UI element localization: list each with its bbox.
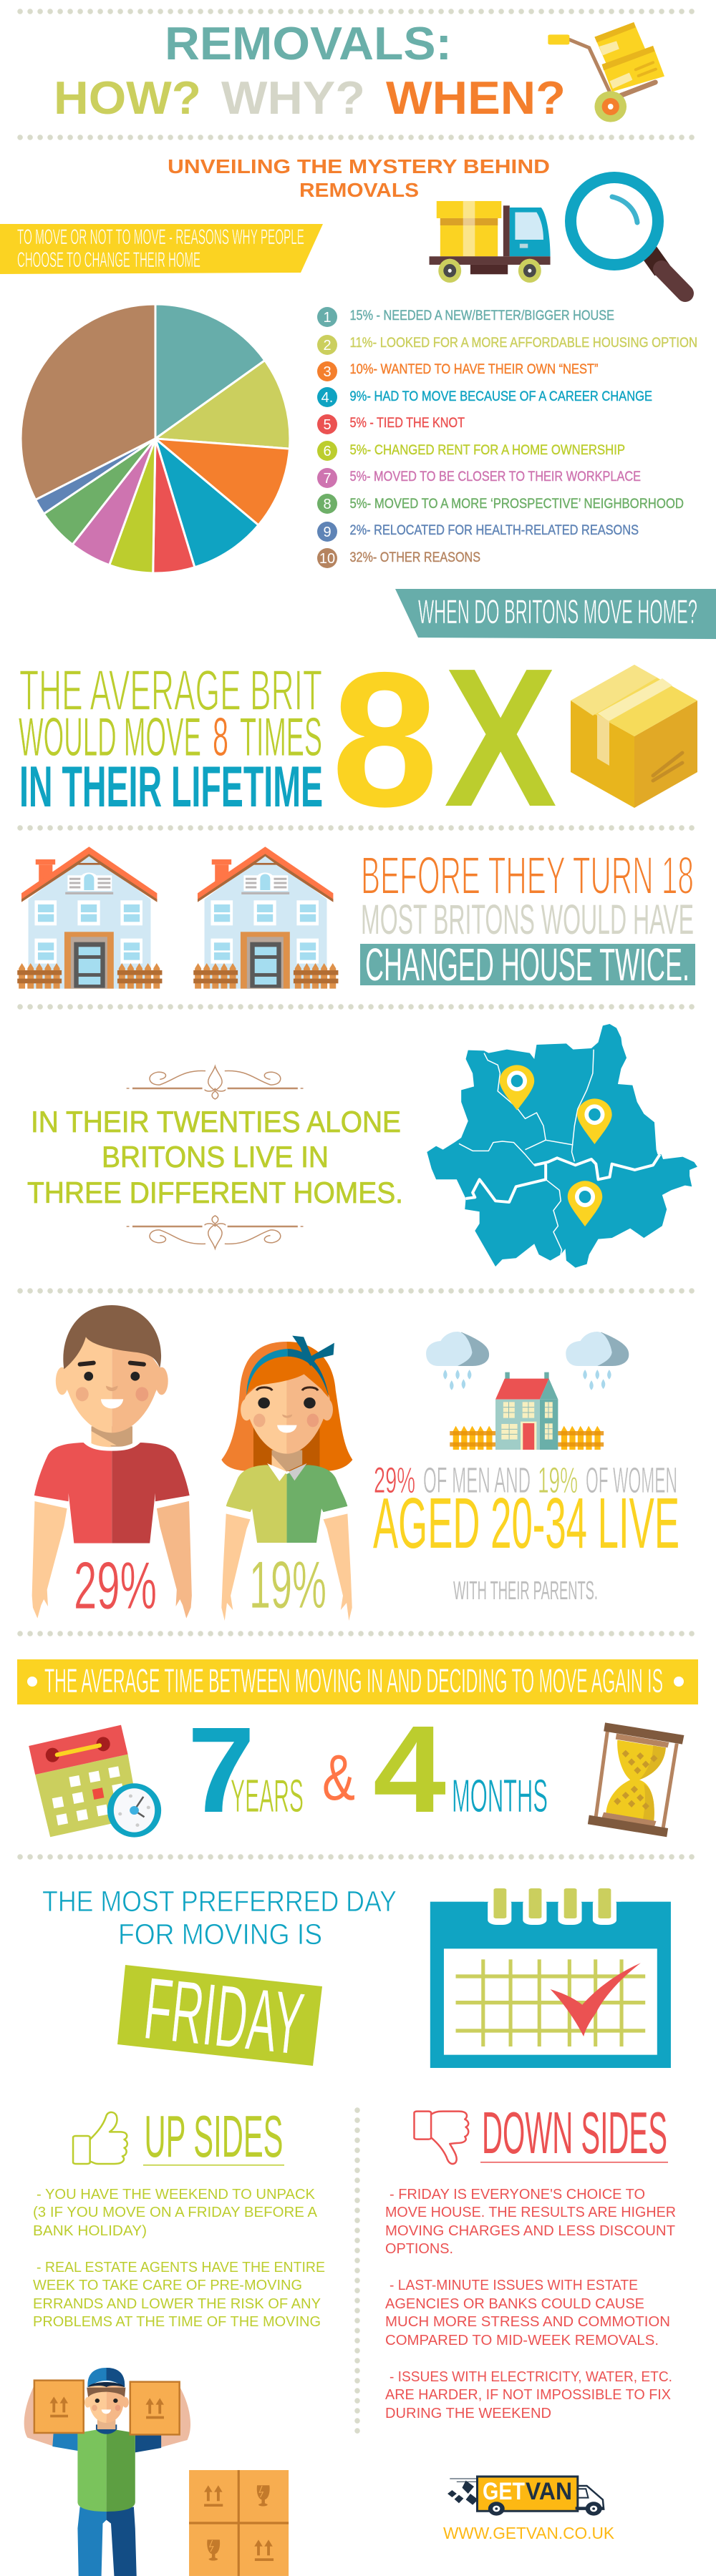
illustration: young man: [32, 1305, 192, 1619]
text: up sides list: - YOU HAVE THE WEEKEND TO UNPACK: [37, 2186, 315, 2202]
banner: reasons why people move: [0, 224, 323, 274]
icon: calendar with clock: [29, 1725, 161, 1838]
text: down sides list: MOVE HOUSE. THE RESULTS ARE HIGHER: [385, 2204, 676, 2220]
text: down sides list: AGENCIES OR BANKS COULD CAUSE: [385, 2296, 644, 2312]
label: friday: FRIDAY: [140, 1960, 308, 2074]
icon: stacked boxes: [189, 2470, 289, 2576]
legend item 2: [317, 335, 697, 355]
logo: getvan: VAN: [526, 2478, 572, 2505]
title: WHEN?: [386, 72, 566, 124]
stat: 7 years and 4 months: &: [322, 1742, 355, 1814]
title: HOW?: [54, 72, 201, 124]
legend item 6: [317, 441, 625, 461]
text: men and women aged 20-34: 19%: [538, 1460, 578, 1501]
legend item 8: [317, 494, 684, 514]
text: average brit moves 8 times: 8: [213, 707, 228, 768]
icon: delivery truck: [430, 201, 551, 283]
ornament: bottom flourish: [127, 1216, 303, 1249]
legend item 8: 8: [323, 497, 332, 512]
text: most preferred day: THE MOST PREFERRED DAY: [42, 1885, 397, 1918]
legend item 9: [317, 522, 639, 542]
stat: 7 years and 4 months: 7: [188, 1702, 255, 1838]
text: average brit moves 8 times: THE AVERAGE BRIT: [19, 658, 322, 722]
title: [54, 17, 566, 124]
big number 8X: X: [444, 628, 558, 848]
legend item 9: 2%- RELOCATED FOR HEALTH-RELATED REASONS: [349, 523, 639, 538]
legend: pie chart reasons: [317, 307, 697, 568]
legend item 5: 5% - TIED THE KNOT: [349, 416, 465, 431]
big number 8X: 8: [332, 632, 438, 847]
title: WHY?: [221, 72, 365, 124]
legend item 1: 1: [323, 310, 332, 326]
pie chart: reasons for moving: [21, 304, 290, 573]
legend item 3: 10%- WANTED TO HAVE THEIR OWN “NEST”: [349, 362, 599, 377]
legend item 4: 9%- HAD TO MOVE BECAUSE OF A CAREER CHANGE: [349, 389, 652, 404]
stat: 7 years and 4 months: 4: [373, 1699, 446, 1838]
legend item 2: 2: [323, 338, 332, 353]
icon: magnifying glass: [565, 172, 685, 293]
text: up sides list: ERRANDS AND LOWER THE RISK OF ANY: [33, 2296, 321, 2312]
text: down sides list: [385, 2186, 676, 2421]
legend item 3: 3: [323, 364, 332, 380]
text: before they turn 18: [360, 846, 695, 990]
label: friday: [117, 1960, 322, 2074]
text: down sides list: - FRIDAY IS EVERYONE'S CHOICE TO: [390, 2186, 645, 2202]
title: REMOVALS:: [165, 17, 452, 69]
legend item 6: 5%- CHANGED RENT FOR A HOME OWNERSHIP: [349, 443, 625, 458]
banner: reasons why people move: CHOOSE TO CHANGE THEIR HOME: [17, 248, 200, 272]
legend item 6: 6: [323, 444, 332, 459]
icon: wall calendar with check mark: [430, 1884, 671, 2068]
illustration: young woman: [221, 1336, 352, 1621]
legend item 1: 15% - NEEDED A NEW/BETTER/BIGGER HOUSE: [349, 308, 614, 323]
text: TIMES: [240, 707, 322, 768]
icon: hand trolley with boxes: [548, 22, 664, 122]
text: MONTHS: [452, 1770, 548, 1822]
legend item 7: 5%- MOVED TO BE CLOSER TO THEIR WORKPLACE: [349, 469, 641, 484]
icon: thumbs down: [414, 2112, 468, 2164]
legend item 10: 10: [319, 551, 335, 567]
text: average brit moves 8 times: [19, 658, 323, 819]
legend item 4: 4.: [321, 390, 333, 406]
legend item 3: [317, 361, 599, 381]
legend item 1: [317, 307, 614, 327]
text: in their twenties: THREE DIFFERENT HOMES.: [27, 1176, 403, 1209]
label: 19 percent: 19%: [249, 1547, 326, 1622]
text: in their twenties: BRITONS LIVE IN: [102, 1140, 329, 1174]
legend item 10: [317, 548, 480, 568]
logo: getvan: [448, 2477, 604, 2516]
icon: house 1: [17, 847, 162, 989]
text: most preferred day: FOR MOVING IS: [118, 1918, 322, 1951]
text: down sides list: OPTIONS.: [385, 2240, 453, 2257]
text: men and women aged 20-34: 29%: [374, 1460, 415, 1501]
text: down sides list: - ISSUES WITH ELECTRICITY, WATER, ETC.: [390, 2368, 672, 2385]
icon: raining clouds left: [426, 1332, 489, 1390]
icon: cardboard box: [571, 665, 697, 808]
subtitle: UNVEILING THE MYSTERY BEHIND: [168, 155, 550, 177]
stat: 7 years and 4 months: [188, 1699, 548, 1838]
subtitle: [168, 155, 550, 201]
logo: getvan: GET: [483, 2478, 525, 2505]
icon: small house with fence: [450, 1372, 604, 1450]
text: most preferred day: [42, 1885, 397, 1951]
stat: 7 years and 4 months: YEARS: [231, 1770, 304, 1822]
text: up sides list: BANK HOLIDAY): [33, 2223, 147, 2239]
illustration: removal man holding boxes: [24, 2368, 190, 2576]
text: men and women aged 20-34: [373, 1460, 679, 1605]
legend item 5: 5: [323, 417, 332, 433]
text: in their twenties: IN THEIR TWENTIES ALONE: [31, 1105, 401, 1138]
text: down sides list: MOVING CHARGES AND LESS DISCOUNT: [385, 2223, 675, 2239]
label: 29 percent: 29%: [74, 1548, 157, 1623]
text: down sides list: MUCH MORE STRESS AND COMMOTION: [385, 2313, 670, 2330]
text: up sides list: [33, 2186, 325, 2330]
text: up sides list: (3 IF YOU MOVE ON A FRIDAY BEFORE A: [33, 2204, 317, 2220]
legend item 10: 32%- OTHER REASONS: [349, 550, 480, 565]
legend item 5: [317, 414, 465, 434]
text: down sides list: DURING THE WEEKEND: [385, 2405, 551, 2421]
legend item 9: 9: [323, 525, 332, 540]
text: down sides list: - LAST-MINUTE ISSUES WITH ESTATE: [390, 2277, 638, 2293]
icon: hourglass: [588, 1722, 684, 1837]
heading: up sides: UP SIDES: [145, 2103, 284, 2170]
legend item 4: [317, 387, 652, 407]
ornament: top flourish: [127, 1066, 303, 1099]
text: up sides list: - REAL ESTATE AGENTS HAVE THE ENTIRE: [37, 2259, 325, 2275]
text: in their twenties: [27, 1105, 403, 1209]
big number 8X: [332, 628, 558, 848]
text: average brit moves 8 times: WOULD MOVE: [19, 707, 201, 768]
map: london with pins: [427, 1024, 697, 1268]
text: website url: WWW.GETVAN.CO.UK: [443, 2524, 615, 2542]
icon: house 2: [193, 847, 338, 989]
text: down sides list: ARE HARDER, IF NOT IMPOSSIBLE TO FIX: [385, 2386, 671, 2403]
banner: reasons why people move: TO MOVE OR NOT TO MOVE - REASONS WHY PEOPLE: [17, 225, 304, 249]
text: average brit moves 8 times: IN THEIR LIFETIME: [19, 755, 323, 819]
text: men and women aged 20-34: OF MEN AND: [423, 1460, 531, 1501]
icon: raining clouds right: [566, 1332, 629, 1390]
text: down sides list: COMPARED TO MID-WEEK REMOVALS.: [385, 2332, 659, 2348]
icon: thumbs up: [73, 2112, 127, 2164]
legend item 7: [317, 468, 641, 488]
legend item 7: 7: [323, 471, 332, 487]
subtitle: REMOVALS: [299, 179, 419, 201]
text: up sides list: WEEK TO TAKE CARE OF PRE-MOVING: [33, 2277, 302, 2293]
text: up sides list: PROBLEMS AT THE TIME OF THE MOVING: [33, 2313, 321, 2330]
